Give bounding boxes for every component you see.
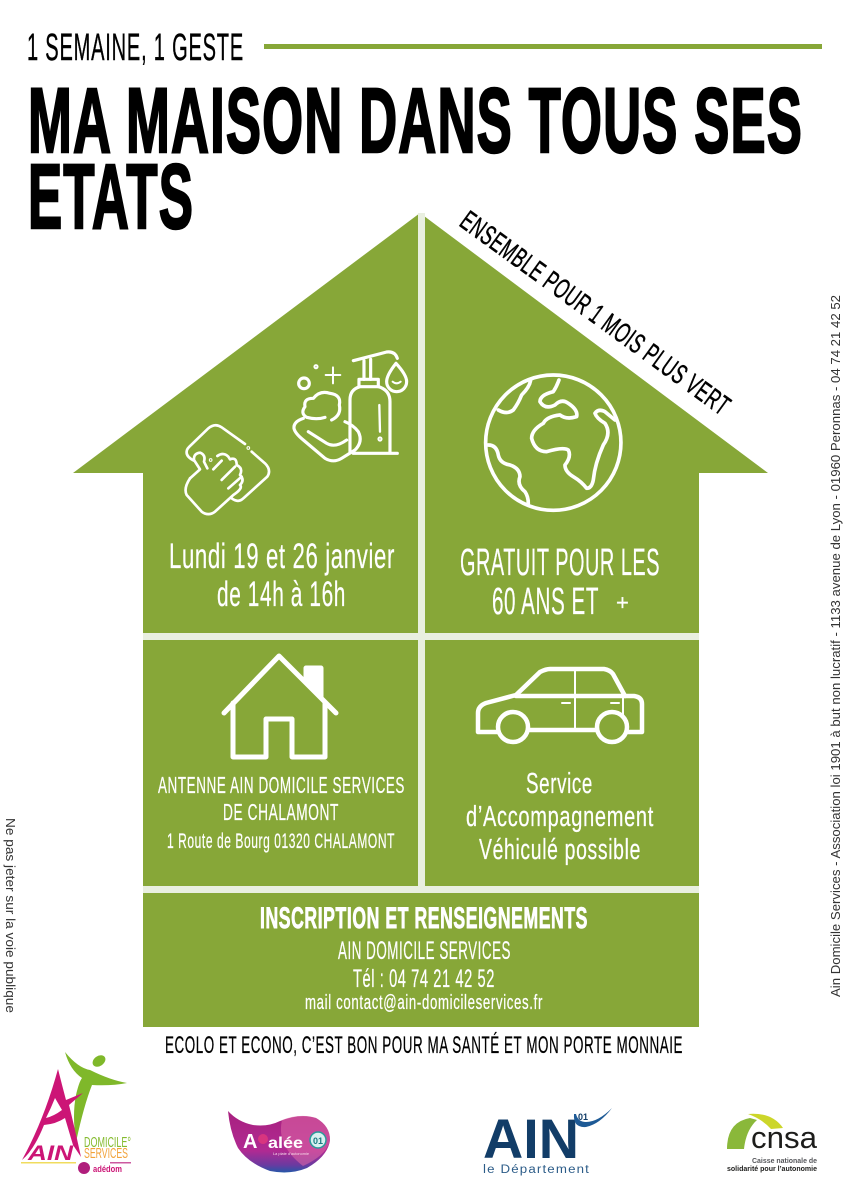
icon: house [224, 656, 336, 757]
logo: Azalée: alée [268, 1135, 303, 1152]
logo: Azalée: 01 [313, 1136, 323, 1146]
panel text: free for over 60s [460, 542, 660, 623]
logo: Ain Domicile Services: SERVICES [84, 1145, 128, 1162]
panel text: venue: 1 Route de Bourg 01320 CHALAMONT [167, 830, 395, 853]
logo: Ain le Département [483, 1107, 612, 1176]
panel text: free for over 60s: GRATUIT POUR LES [460, 542, 660, 584]
panel text: transport service [466, 768, 654, 866]
panel text: venue: DE CHALAMONT [223, 799, 339, 825]
logo: Azalée: La plate d'autonomie [273, 1151, 310, 1156]
logo: Ain Domicile Services: adédom [93, 1164, 122, 1174]
logo: Ain le Département: le Département [483, 1164, 590, 1176]
icon: car [478, 669, 642, 742]
vertical note left: Ne pas jeter sur la voie publique [3, 818, 18, 1013]
panel text: venue: ANTENNE AIN DOMICILE SERVICES [158, 772, 405, 798]
logo: Azalée: A [243, 1131, 257, 1153]
logo: Azalée [228, 1111, 330, 1172]
panel text: dates: de 14h à 16h [217, 575, 346, 614]
panel text: free for over 60s: 60 ANS ET [492, 581, 599, 623]
title: ETATS [28, 146, 194, 248]
logo: CNSA: solidarité pour l’autonomie [727, 1164, 817, 1173]
kicker green rule [264, 44, 822, 49]
panel text: registration: mail contact@ain-domicileservices.fr [305, 992, 543, 1014]
kicker heading: 1 SEMAINE, 1 GESTE [27, 27, 244, 69]
logo: Ain le Département: AIN [483, 1107, 579, 1170]
title [28, 70, 803, 248]
panel text: transport service: Service [526, 768, 593, 800]
logo: CNSA: Caisse nationale de [752, 1156, 817, 1165]
panel text: registration: INSCRIPTION ET RENSEIGNEMENTS [260, 902, 588, 935]
panel text: registration [260, 902, 588, 1014]
icon: earth globe [486, 375, 621, 510]
logo: Ain Domicile Services: AIN [27, 1142, 74, 1165]
panel text: venue [158, 772, 405, 853]
panel text: free for over 60s: + [616, 590, 630, 615]
logo: Ain Domicile Services [21, 1052, 131, 1174]
logo: Ain Domicile Services: DOMICILE° [84, 1134, 131, 1151]
panel text: registration: AIN DOMICILE SERVICES [338, 937, 511, 965]
panel text: transport service: d’Accompagnement [466, 801, 654, 833]
panel text: dates: Lundi 19 et 26 janvier [169, 537, 395, 576]
logo: Ain le Département: 01 [578, 1112, 588, 1122]
house shape [73, 213, 768, 1027]
logo: CNSA: cnsa [751, 1120, 818, 1155]
panel text: dates [169, 537, 395, 614]
icon: soap and pump bottle [294, 352, 407, 461]
panel text: transport service: Véhiculé possible [479, 834, 641, 866]
logo: CNSA [727, 1114, 818, 1173]
panel text: registration: Tél : 04 74 21 42 52 [353, 965, 495, 993]
vertical legal note right: Ain Domicile Services - Association loi 1901 à but non lucratif - 1133 avenue de Lyon - 01960 Peronnas - 04 74 21 42 52 [828, 295, 843, 997]
icon: hand wiping with cloth [186, 425, 269, 514]
